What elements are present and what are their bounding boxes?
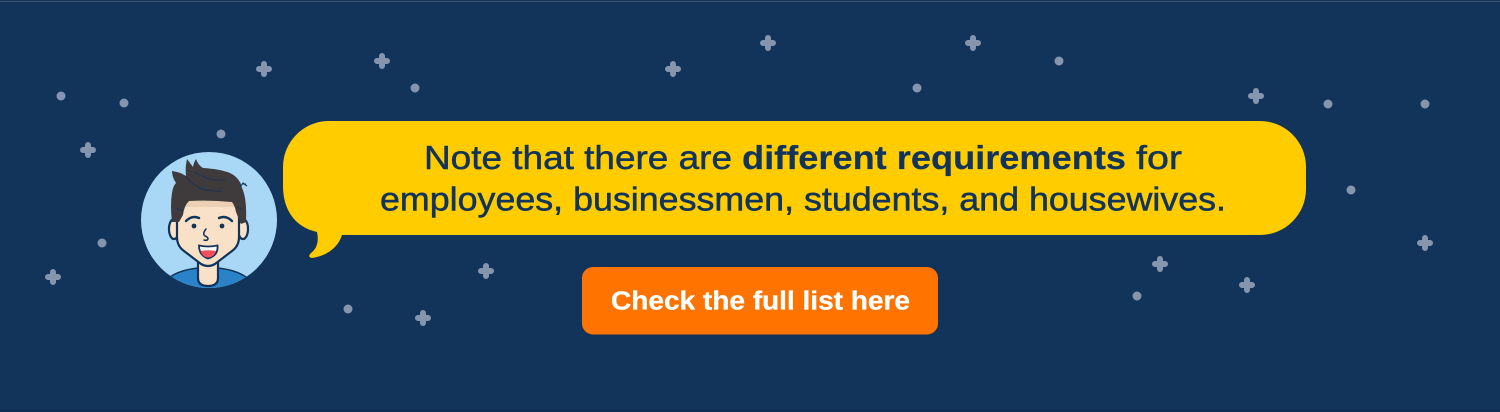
speech bubble: [283, 121, 1306, 258]
eyebrows: [186, 217, 232, 221]
bubble text: [380, 139, 1226, 218]
line two: employees, businessmen, students, and housewives.: [380, 180, 1226, 218]
avatar: smiling man: [141, 152, 277, 297]
hair strands: [176, 172, 242, 211]
button label: Check the full list here: [611, 288, 910, 316]
star field: [48, 38, 1430, 323]
ears: [169, 219, 179, 239]
nose: [204, 229, 208, 240]
face: [177, 198, 239, 266]
line one, bold emphasis: different requirements: [742, 139, 1126, 176]
shirt: [170, 267, 246, 288]
forehead shadow: [185, 201, 235, 207]
mouth: [199, 246, 218, 258]
call to action button: [582, 267, 938, 334]
line one, regular start: Note that there are: [424, 139, 732, 176]
eyes: [192, 224, 196, 228]
neck: [198, 258, 218, 286]
hair curl: [240, 183, 247, 187]
line one, regular end: for: [1136, 139, 1182, 176]
hair: [171, 159, 246, 224]
